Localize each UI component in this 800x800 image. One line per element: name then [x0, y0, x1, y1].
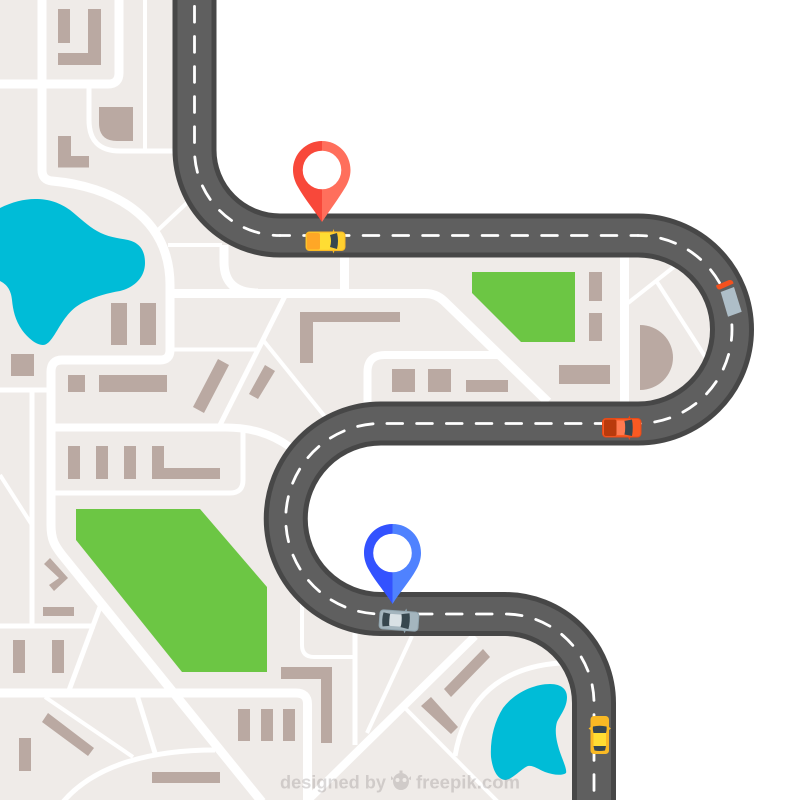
- watermark: designed by freepik.com: freepik.com: [416, 772, 520, 792]
- park: lower left: [76, 509, 267, 672]
- panel: white background beyond the road: [194, 0, 800, 800]
- winding road: [194, 0, 732, 800]
- car: yellow, on upper straight: [306, 229, 345, 254]
- lake: lower right: [491, 684, 567, 780]
- map pin: blue: [364, 524, 421, 604]
- road surface: [194, 0, 732, 800]
- watermark: designed by freepik.com: [280, 770, 520, 792]
- car: silver, on lower straight: [379, 607, 419, 634]
- icon: freepik mascot: [391, 770, 411, 790]
- watermark: designed by freepik.com: designed by: [280, 772, 386, 792]
- road centre dashes: [194, 0, 732, 800]
- car: red, on middle straight: [602, 416, 641, 440]
- car: yellow, heading down the final stretch: [588, 716, 611, 754]
- lake: upper left: [0, 199, 145, 345]
- park: upper right: [472, 272, 575, 342]
- road edge: [194, 0, 732, 800]
- truck on right bend: [716, 280, 742, 317]
- map pin: red: [293, 141, 350, 222]
